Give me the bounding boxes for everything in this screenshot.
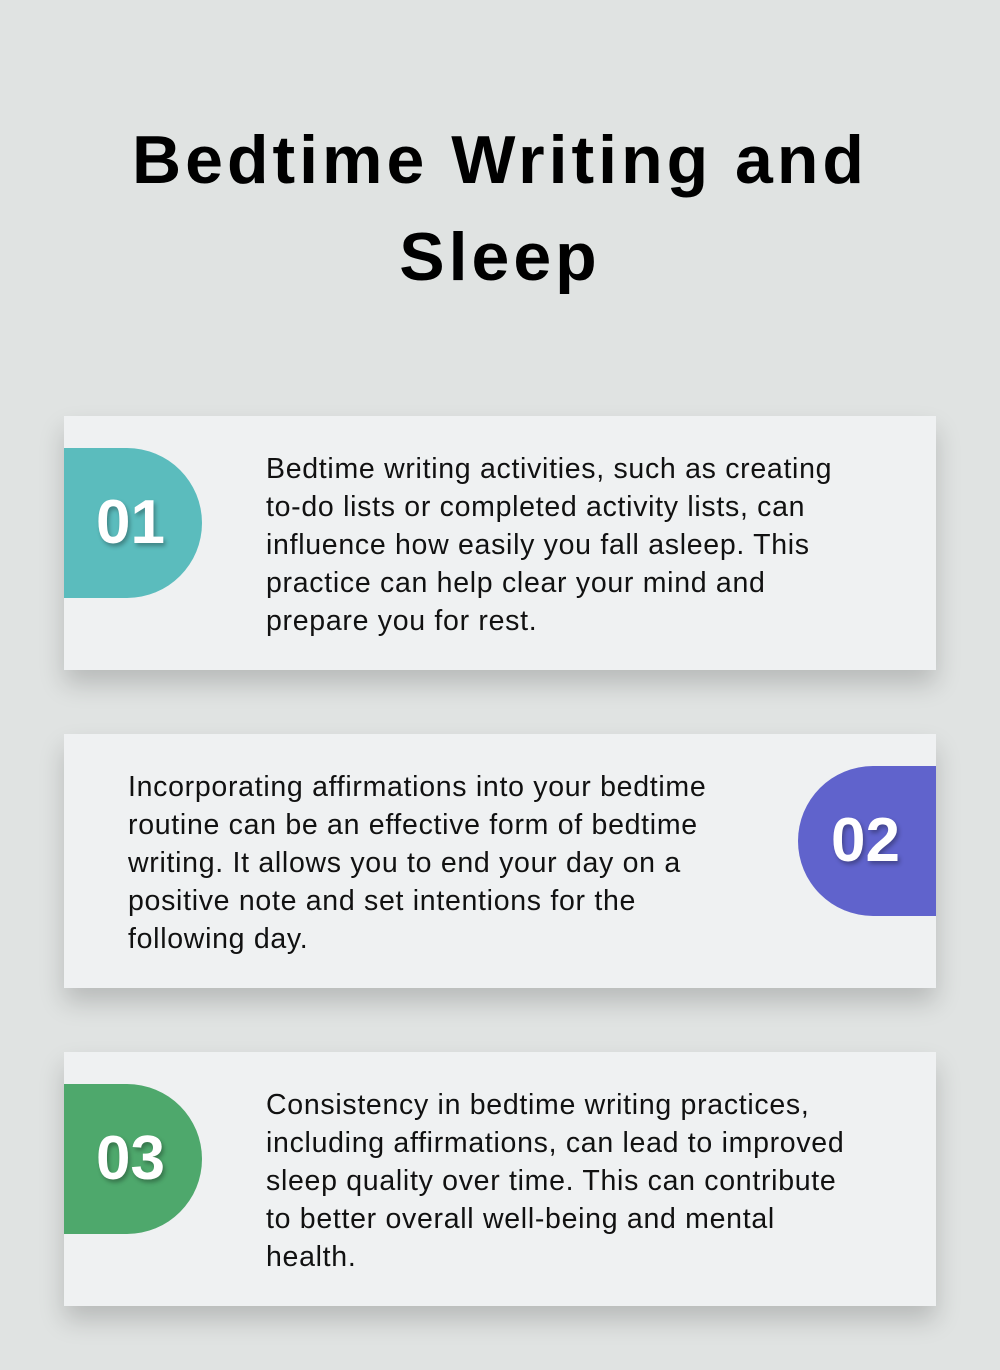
text 01: practice can help clear your mind and — [266, 567, 766, 599]
text 02: routine can be an effective form of bedtime — [128, 809, 698, 841]
badge 03 — [64, 1084, 202, 1234]
title: Sleep — [399, 219, 601, 295]
badge 02 — [798, 766, 936, 916]
text 02: Incorporating affirmations into your bedtime — [128, 771, 706, 803]
panel: card 01 — [64, 416, 936, 670]
panel: card 03 — [64, 1052, 936, 1306]
text 03: health. — [266, 1241, 356, 1273]
text 01: to-do lists or completed activity lists, can — [266, 491, 805, 523]
text 03: to better overall well-being and mental — [266, 1203, 775, 1235]
badge 03: 03 — [96, 1124, 165, 1193]
badge 02: 02 — [831, 806, 900, 875]
text 01: prepare you for rest. — [266, 605, 537, 637]
text 01: influence how easily you fall asleep. This — [266, 529, 810, 561]
text 01: Bedtime writing activities, such as creating — [266, 453, 832, 485]
title — [132, 122, 868, 295]
text 03: including affirmations, can lead to improved — [266, 1127, 844, 1159]
text 01 — [266, 453, 832, 637]
badge 01: 01 — [96, 488, 165, 557]
title: Bedtime Writing and — [132, 122, 868, 198]
text 03 — [266, 1089, 844, 1273]
text 03: sleep quality over time. This can contribute — [266, 1165, 836, 1197]
panel: card 02 — [64, 734, 936, 988]
text 02 — [128, 771, 706, 955]
text 02: following day. — [128, 923, 308, 955]
text 02: writing. It allows you to end your day on a — [128, 847, 681, 879]
text 03: Consistency in bedtime writing practices, — [266, 1089, 810, 1121]
badge 01 — [64, 448, 202, 598]
text 02: positive note and set intentions for the — [128, 885, 636, 917]
